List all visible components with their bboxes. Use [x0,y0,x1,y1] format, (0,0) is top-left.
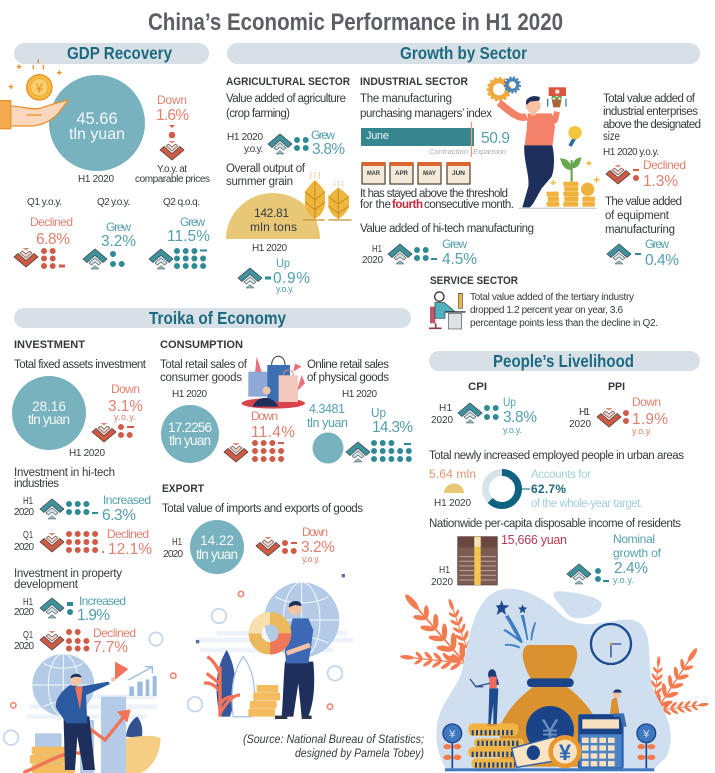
metric: equipment manufacturing grew 0.4%: of equipment [605,210,670,222]
metric: exports down 3.2% [256,525,335,564]
metric: GDP down 1.6% [135,93,210,185]
export column: EXPORT [162,483,204,495]
heading: People's Livelihood [429,351,700,371]
metric: property investment H1 increased 1.9%: H1 [23,597,33,608]
metric: industrial enterprises declined 1.3% [603,93,701,190]
metric: property investment Q1 declined 7.7%: 2020 [14,641,34,652]
industrial sector: INDUSTRIAL SECTOR [360,76,468,88]
metric: Q2 grew 3.2% [83,197,136,269]
metric: CPI up 3.8%: H1 [439,403,452,414]
agricultural sector: summer grain [226,176,293,188]
online sales value: tln yuan [307,416,348,430]
agricultural sector: Value added of agriculture [226,93,346,105]
heading: GDP Recovery [14,43,209,64]
consumption column: Total retail sales of [160,359,248,371]
metric: equipment manufacturing grew 0.4% [605,196,682,269]
employment figure [429,467,476,509]
industrial sector [360,76,701,269]
metric: GDP down 1.6%: Down [157,93,187,107]
metric: online sales up 14.3% [346,405,413,462]
illustration: businessman with rising chart [4,632,176,773]
metric: nominal growth 2.4%: Nominal [613,532,655,546]
metric: Q2 grew 3.2%: Grew [106,220,131,234]
heading: Troika of Economy [14,308,411,328]
GDP total circle: 45.66 [76,110,118,128]
heading: GDP Recovery: GDP Recovery [67,43,172,63]
icon: shopping bags [242,356,305,409]
illustration: man holding donut chart [188,574,353,717]
metric: hi-tech grew 4.5%: Grew [442,237,467,251]
investment column: development [14,579,79,591]
retail sales circle: tln yuan [169,433,211,448]
service sector: dropped 1.2 percent year on year, 3.6 [470,305,623,316]
H1 2020 label: H1 2020 [78,174,114,185]
source credit: designed by Pamela Tobey) [295,746,424,760]
consumption column: CONSUMPTION [160,339,243,351]
metric: equipment manufacturing grew 0.4%: Grew [645,237,669,251]
PMI bar [361,122,510,157]
metric: CPI up 3.8%: 3.8% [503,409,537,426]
metric: PPI down 1.9%: H1 [579,407,590,418]
metric: hi-tech investment Q1 declined 12.1% [14,527,152,558]
metric: PPI down 1.9%: 2020 [569,419,591,430]
consumption column: of physical goods [307,372,389,384]
metric: PPI down 1.9%: PPI [608,381,625,393]
icons: four calendars: JUN [452,171,465,177]
metric: PPI down 1.9% [569,381,668,436]
metric: investment down 3.1% [92,382,143,442]
service sector [429,275,658,329]
metric: grain up 0.9%: 0.9% [273,270,310,287]
metric: industrial enterprises declined 1.3%: above the designated [603,119,701,131]
heading: Growth by Sector [227,43,700,64]
metric: CPI up 3.8% [431,381,537,435]
employment figure: 5.64 mln [429,467,476,481]
source credit: (Source: National Bureau of Statistics; [243,732,424,746]
metric: exports down 3.2%: Down [302,525,328,539]
metric: investment down 3.1%: Down [111,382,140,396]
metric: CPI up 3.8%: y.o.y. [503,425,522,435]
metric: grain up 0.9%: Up [276,256,290,270]
icon: stack of banknotes [458,537,497,585]
export column [162,483,363,574]
metric: hi-tech investment Q1 declined 12.1%: 12.1% [108,541,152,558]
metric: property investment H1 increased 1.9% [14,594,126,624]
investment column: industries [14,478,59,490]
illustration: money bag with coins and clock [395,586,709,771]
export circle: H1 [172,537,182,548]
source credit [243,732,424,760]
metric: property investment H1 increased 1.9%: 1.9% [77,607,110,624]
metric: agriculture grew 3.8% [227,128,345,158]
metric: hi-tech grew 4.5%: 2020 [362,255,383,266]
metric: investment down 3.1%: y.o.y. [114,412,136,422]
service sector: SERVICE SECTOR [430,275,518,287]
investment column [12,339,152,656]
PMI bar: Expansion [473,147,506,156]
retail sales circle [161,405,219,463]
metric: agriculture grew 3.8%: Grew [311,128,335,142]
metric: retail sales down 11.4% [224,409,295,462]
agricultural sector: Overall output of [226,163,306,175]
metric: hi-tech grew 4.5% [362,237,477,268]
consumption column: H1 2020 [342,389,377,400]
investment column: Total fixed assets investment [14,359,147,371]
metric: Q1 declined 6.8%: 6.8% [36,231,70,248]
metric: equipment manufacturing grew 0.4%: The value added [605,196,682,208]
illustration: money bag with coins and clock: ¥ [642,729,650,741]
metric: nominal growth 2.4% [567,532,662,585]
metric: hi-tech investment H1 increased 6.3% [14,493,151,524]
agricultural sector: (crop farming) [226,108,290,120]
metric: hi-tech investment Q1 declined 12.1%: 2020 [14,542,34,553]
metric: industrial enterprises declined 1.3%: H1 2020 y.o.y. [603,147,659,158]
icon: hand holding coin [0,59,68,129]
icons: four calendars [362,162,470,184]
icon: office worker at desk [429,292,466,329]
export circle [163,520,244,574]
export circle: 14.22 [200,533,234,548]
industrial sector: consecutive month. [424,199,514,211]
title: China’s Economic Performance in H1 2020 [148,9,563,36]
metric: agriculture grew 3.8%: 3.8% [312,141,345,158]
panel: troika of economy [12,308,413,656]
metric: income 15,666 yuan: 15,666 yuan [501,533,567,547]
fixed assets circle [12,376,105,459]
investment column: Investment in property [14,568,122,580]
industrial sector: The manufacturing [360,93,452,105]
industrial sector: It has stayed above the threshold [360,188,508,200]
metric: retail sales down 11.4%: Down [251,409,278,423]
industrial sector: for the [360,199,391,211]
metric: GDP down 1.6%: Y.o.y. at [157,164,187,175]
export circle: 2020 [163,549,183,560]
industrial sector: fourth [392,199,423,211]
metric: Q1 declined 6.8% [14,197,73,267]
illustration: money bag with coins and clock: ¥ [448,729,456,741]
icons: four calendars: APR [395,171,409,177]
metric: industrial enterprises declined 1.3%: Total value added of [603,93,696,105]
metric: online sales up 14.3%: Up [371,405,386,420]
panel: people's livelihood: Total newly increased employed people in urban areas [429,450,684,462]
metric: Q1 declined 6.8%: Q1 y.o.y. [27,197,62,208]
donut chart: 62.7% of target: Accounts for [531,469,591,481]
metric: investment down 3.1%: 3.1% [108,398,143,415]
metric: equipment manufacturing grew 0.4%: 0.4% [645,252,679,269]
PMI bar: 50.9 [481,130,510,147]
metric: property investment H1 increased 1.9%: Increased [79,594,126,608]
heading: Growth by Sector: Growth by Sector [400,43,527,63]
metric: hi-tech grew 4.5%: H1 [372,244,382,255]
employment figure: H1 2020 [434,498,471,509]
consumption column: Online retail sales [307,359,389,371]
metric: hi-tech investment H1 increased 6.3%: Increased [103,493,151,507]
metric: PPI down 1.9%: y.o.y. [632,426,652,436]
metric: Q1 declined 6.8%: Declined [30,215,73,229]
fixed assets circle: H1 2020 [69,448,105,459]
metric: hi-tech grew 4.5%: 4.5% [442,251,477,268]
PMI bar: Contraction [429,147,468,156]
consumption column: consumer goods [160,372,242,384]
metric: industrial enterprises declined 1.3%: size [603,131,620,143]
metric: PPI down 1.9%: 1.9% [632,411,668,428]
panel: people's livelihood: Nationwide per-capita disposable income of residents [429,518,681,530]
metric: PPI down 1.9%: Down [632,395,661,409]
metric: industrial enterprises declined 1.3%: 1.3% [643,173,678,190]
heading: People's Livelihood: People’s Livelihood [493,351,634,371]
service sector: percentage points less than the decline in Q2. [470,318,658,329]
panel: GDP recovery [0,43,210,269]
export column: Total value of imports and exports of goods [162,503,363,515]
PMI bar: June [366,130,389,142]
metric: nominal growth 2.4%: y.o.y. [613,575,634,585]
metric: Q2 grew 3.2%: 3.2% [101,233,136,250]
icon: wheat [303,172,352,220]
panel: people's livelihood [429,351,700,588]
metric: Q2 q.o.q. grew 11.5%: Q2 q.o.q. [163,197,200,208]
investment column: Investment in hi-tech [14,467,115,479]
heading: Troika of Economy: Troika of Economy [149,308,286,328]
metric: hi-tech investment H1 increased 6.3%: 2020 [14,507,34,518]
consumption column [160,339,413,464]
summer grain half dome: mln tons [250,220,297,234]
metric: property investment Q1 declined 7.7% [14,626,136,656]
metric: CPI up 3.8%: CPI [468,381,487,393]
metric: CPI up 3.8%: 2020 [431,415,453,426]
panel: growth by sector [226,43,701,329]
metric: nominal growth 2.4%: 2.4% [614,560,648,577]
metric: equipment manufacturing grew 0.4%: manufacturing [605,224,675,236]
donut chart: 62.7% of target: 62.7% [531,482,566,496]
metric: Q2 grew 3.2%: Q2 y.o.y. [97,197,130,208]
metric: property investment H1 increased 1.9%: 2020 [14,607,34,618]
summer grain half dome [226,193,320,254]
donut chart: 62.7% of target [486,469,643,510]
icons: four calendars: MAY [423,171,436,177]
metric: agriculture grew 3.8%: H1 2020 [227,132,263,143]
metric: online sales up 14.3%: 14.3% [372,419,413,436]
icons: four calendars: MAR [367,171,381,177]
GDP total circle: tln yuan [69,126,125,143]
illustration: money bag with coins and clock: ¥ [541,714,559,747]
industrial sector: Value added of hi-tech manufacturing [360,223,534,235]
agricultural sector: AGRICULTURAL SECTOR [226,76,350,88]
metric: hi-tech investment Q1 declined 12.1%: Declined [107,527,149,541]
metric: property investment Q1 declined 7.7%: Q1 [23,630,33,641]
fixed assets circle: 28.16 [32,399,66,414]
metric: CPI up 3.8%: Up [503,395,516,409]
investment column: INVESTMENT [14,339,85,351]
icon: hand holding coin: ¥ [35,81,44,96]
metric: Q2 q.o.q. grew 11.5%: Grew [180,215,205,229]
donut chart: 62.7% of target: of the whole-year target. [531,498,643,510]
consumption column: H1 2020 [172,389,207,400]
metric: income 15,666 yuan [431,533,567,588]
metric: hi-tech investment Q1 declined 12.1%: Q1 [23,530,33,541]
metric: GDP down 1.6%: 1.6% [156,107,189,124]
metric: property investment Q1 declined 7.7%: 7.7% [93,639,128,656]
GDP total circle [49,75,145,171]
orange leaf branches [395,586,709,717]
illustration: money bag with coins and clock: ¥ [559,740,572,765]
online sales value: 4.3481 [309,402,345,416]
fixed assets circle: tln yuan [28,412,70,427]
service sector: Total value added of the tertiary industry [470,292,634,303]
summer grain half dome: H1 2020 [252,243,287,254]
metric: hi-tech investment H1 increased 6.3%: H1 [23,496,33,507]
metric: Q2 q.o.q. grew 11.5% [149,197,210,269]
metric: income 15,666 yuan: H1 [439,565,450,576]
metric: exports down 3.2%: y.o.y. [302,554,320,564]
illustration: man with gears, plant and coins [488,77,600,208]
online sales value [307,402,348,464]
metric: exports down 3.2%: 3.2% [301,539,335,556]
metric: industrial enterprises declined 1.3%: Declined [643,158,686,172]
metric: agriculture grew 3.8%: y.o.y. [244,144,263,155]
metric: grain up 0.9%: y.o.y. [276,284,294,294]
agricultural sector [226,76,352,294]
retail sales circle: 17.2256 [168,420,212,435]
summer grain half dome: 142.81 [254,206,289,220]
metric: industrial enterprises declined 1.3%: industrial enterprises [603,106,698,118]
metric: Q2 q.o.q. grew 11.5%: 11.5% [167,228,210,245]
metric: GDP down 1.6%: comparable prices [135,174,210,185]
metric: nominal growth 2.4%: growth of [613,546,662,560]
export circle: tln yuan [196,547,238,562]
metric: income 15,666 yuan: 2020 [431,577,453,588]
metric: hi-tech investment H1 increased 6.3%: 6.3% [102,507,136,524]
metric: property investment Q1 declined 7.7%: Declined [93,626,136,640]
metric: retail sales down 11.4%: 11.4% [251,424,295,441]
industrial sector: purchasing managers’ index [360,108,492,120]
metric: grain up 0.9% [238,256,310,294]
